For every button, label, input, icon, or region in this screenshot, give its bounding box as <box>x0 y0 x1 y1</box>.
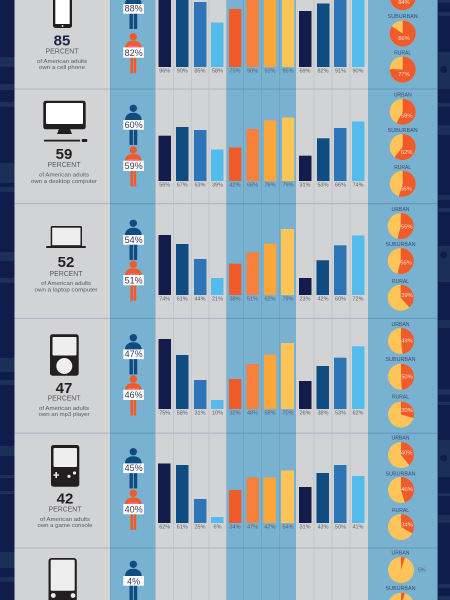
bar chart: cell phone: 82% <box>317 68 329 74</box>
bar chart: mp3 player: 32% <box>229 410 241 416</box>
pie charts: mp3 player: 49% <box>401 338 413 344</box>
bar chart: game console: 61% <box>177 524 188 530</box>
pie charts: laptop computer: URBAN <box>392 207 410 213</box>
pie charts: game console: 46% <box>401 487 413 493</box>
bar chart: desktop computer <box>158 118 364 188</box>
bar chart: game console: 41% <box>352 524 364 530</box>
bar chart: cell phone <box>158 0 364 74</box>
icon: game console <box>51 445 79 487</box>
bar chart: laptop computer: 44% <box>194 296 206 302</box>
pie charts: mp3 player <box>386 322 416 428</box>
stat: 85 percent: of American adults <box>37 59 87 65</box>
stat: 47 percent: own an mp3 player <box>38 412 90 418</box>
bar chart: game console: 6% <box>214 524 222 530</box>
bar chart: game console: 43% <box>317 524 329 530</box>
stat: 85 percent: 85 <box>54 32 70 50</box>
gender figures: cell phone: 82% <box>125 48 143 58</box>
bar chart: game console: 54% <box>282 524 294 530</box>
bar chart: laptop computer: 23% <box>299 296 311 302</box>
stat: 52 percent <box>34 254 98 294</box>
bar chart: desktop computer: 42% <box>229 182 241 188</box>
bar chart: desktop computer: 63% <box>194 182 206 188</box>
stat: 85 percent <box>37 32 87 71</box>
stat: 47 percent: 47 <box>56 380 72 397</box>
bar chart: laptop computer: 51% <box>247 296 258 302</box>
bar chart: game console <box>158 464 364 530</box>
gender figures: game console: 45% <box>125 463 143 473</box>
pie charts: desktop computer: SUBURBAN <box>388 128 418 134</box>
bar chart: mp3 player: 62% <box>352 410 364 416</box>
bar chart: desktop computer: 31% <box>299 182 311 188</box>
bar chart: desktop computer: 39% <box>212 182 223 188</box>
gender figures: laptop computer: 51% <box>125 275 143 285</box>
pie charts: laptop computer: RURAL <box>392 279 409 285</box>
gender figures: desktop computer: 60% <box>125 120 143 130</box>
stat: 47 percent: of American adults <box>39 406 89 412</box>
panel: laptop computer row <box>34 207 416 311</box>
stat: 59 percent: of American adults <box>39 172 89 178</box>
gender figures: desktop computer <box>123 105 144 186</box>
stat: 52 percent: of American adults <box>41 281 91 287</box>
bar chart: game console: 25% <box>194 524 206 530</box>
pie charts: desktop computer: RURAL <box>394 165 411 171</box>
pie charts: mp3 player: SUBURBAN <box>386 357 416 363</box>
bar chart: mp3 player: 31% <box>194 410 206 416</box>
bar chart: laptop computer: 74% <box>159 296 170 302</box>
bar chart: game console: 47% <box>264 524 276 530</box>
gender figures: e-reader: 4% <box>127 576 140 586</box>
bar chart: laptop computer <box>158 229 364 302</box>
bar chart: laptop computer: 21% <box>212 296 223 302</box>
pie charts: game console: SUBURBAN <box>386 472 416 478</box>
stat: 59 percent <box>31 146 97 185</box>
left dark sidebar bands <box>0 57 14 582</box>
pie charts: game console: 34% <box>401 522 413 528</box>
bar chart: cell phone: 85% <box>194 68 206 74</box>
stat: 42 percent <box>38 490 93 529</box>
bar chart: cell phone: 90% <box>177 68 188 74</box>
bar chart: game console: 62% <box>159 524 170 530</box>
pie charts: mp3 player: 30% <box>401 408 413 414</box>
stat: 42 percent: PERCENT <box>48 506 82 514</box>
bar chart: game console: 50% <box>335 524 346 530</box>
bar chart: laptop computer: 62% <box>264 296 276 302</box>
stat: 52 percent: own a laptop computer <box>34 288 98 294</box>
gender figures: cell phone: 88% <box>125 4 143 14</box>
bar chart: mp3 player: 26% <box>299 410 311 416</box>
pie charts: game console <box>386 436 416 540</box>
pie charts: laptop computer: 55% <box>401 225 413 231</box>
gender figures: desktop computer: 59% <box>125 161 143 171</box>
bar chart: desktop computer: 56% <box>159 182 170 188</box>
stat: 59 percent: 59 <box>56 146 72 163</box>
bar chart: laptop computer: 79% <box>282 296 294 302</box>
pie charts: cell phone: 84% <box>398 0 410 6</box>
pie charts: desktop computer: 62% <box>401 150 413 156</box>
pie charts: game console: 40% <box>401 451 413 457</box>
bar chart: desktop computer: 79% <box>282 182 294 188</box>
panel: game console row <box>38 436 416 540</box>
pie charts: cell phone: SUBURBAN <box>388 14 418 20</box>
icon: laptop <box>46 226 86 248</box>
pie charts: laptop computer: SUBURBAN <box>386 242 416 248</box>
bar chart: cell phone: 58% <box>212 68 223 74</box>
bar chart: desktop computer: 74% <box>352 182 364 188</box>
bar chart: desktop computer: 66% <box>335 182 346 188</box>
pie charts: mp3 player: 50% <box>401 375 413 381</box>
stat: 59 percent: own a desktop computer <box>31 179 97 185</box>
pie charts: desktop computer <box>388 92 418 197</box>
bar chart: desktop computer: 53% <box>317 182 329 188</box>
bar chart: game console: 34% <box>229 524 241 530</box>
icon: cell phone <box>53 0 72 28</box>
stat: 52 percent: 52 <box>58 254 74 271</box>
pie charts: laptop computer <box>386 207 416 311</box>
gender figures: laptop computer: 54% <box>125 235 143 245</box>
pie charts: cell phone <box>388 0 418 82</box>
bar chart: laptop computer: 38% <box>229 296 241 302</box>
stat: 47 percent <box>38 380 90 418</box>
gender figures: mp3 player: 47% <box>125 349 143 359</box>
bar chart: laptop computer: 61% <box>177 296 188 302</box>
bar chart: mp3 player <box>158 339 364 416</box>
bar chart: game console: 31% <box>299 524 311 530</box>
bar chart: laptop computer: 72% <box>352 296 364 302</box>
panel: mp3 player row <box>38 322 416 428</box>
icon: mp3 player <box>50 334 79 376</box>
gender figures: mp3 player <box>123 334 144 416</box>
pie charts: cell phone: 77% <box>398 72 410 78</box>
bar chart: cell phone: 95% <box>282 68 294 74</box>
stat: 42 percent: own a game console <box>38 523 93 529</box>
icon: e-reader <box>48 558 77 600</box>
stat: 47 percent: PERCENT <box>48 396 81 402</box>
bar chart: desktop computer: 76% <box>264 182 276 188</box>
gender figures: game console <box>123 448 144 530</box>
pie charts: desktop computer: 56% <box>400 186 412 192</box>
stat: 42 percent: 42 <box>57 490 73 508</box>
pie charts: game console: URBAN <box>392 436 410 442</box>
bar chart: mp3 player: 48% <box>247 410 258 416</box>
bar chart: cell phone: 75% <box>229 68 241 74</box>
panel: desktop computer row <box>31 92 418 197</box>
gender figures: mp3 player: 46% <box>125 390 143 400</box>
pie charts: cell phone: 86% <box>398 36 410 42</box>
bar chart: cell phone: 69% <box>299 68 311 74</box>
bar chart: mp3 player: 58% <box>177 410 188 416</box>
gender figures: game console: 40% <box>125 504 143 514</box>
stat: 85 percent: PERCENT <box>46 48 79 56</box>
bar chart: desktop computer: 66% <box>247 182 258 188</box>
bar chart: cell phone: 90% <box>247 68 258 74</box>
bar chart: cell phone: 93% <box>264 68 276 74</box>
bar chart: cell phone: 96% <box>159 68 170 74</box>
gender figures: laptop computer <box>123 220 144 301</box>
pie charts: e-reader: 5% <box>418 568 426 574</box>
bar chart: mp3 player: 38% <box>317 410 329 416</box>
pie charts: desktop computer: URBAN <box>394 92 412 98</box>
bar chart: mp3 player: 53% <box>335 410 346 416</box>
stat: 59 percent: PERCENT <box>48 162 81 169</box>
bar chart: laptop computer: 60% <box>335 296 346 302</box>
icon: desktop computer <box>43 101 87 142</box>
stat: 52 percent: PERCENT <box>50 271 83 278</box>
pie charts: cell phone: RURAL <box>394 50 411 56</box>
bar chart: mp3 player: 70% <box>282 410 294 416</box>
pie charts: e-reader: SUBURBAN <box>386 586 416 592</box>
gender figures: e-reader <box>123 561 144 600</box>
bar chart: mp3 player: 75% <box>159 410 170 416</box>
bar chart: laptop computer: 42% <box>317 296 329 302</box>
bar chart: game console: 47% <box>247 524 258 530</box>
bar chart: cell phone: 91% <box>335 68 346 74</box>
pie charts: game console: RURAL <box>392 508 409 514</box>
pie charts: mp3 player: URBAN <box>392 322 410 328</box>
pie charts: mp3 player: RURAL <box>392 394 409 400</box>
gender figures: cell phone <box>123 0 144 73</box>
bar chart: cell phone: 90% <box>352 68 364 74</box>
pie charts: desktop computer: 59% <box>401 114 413 120</box>
pie charts: laptop computer: 55% <box>400 261 412 267</box>
bar chart: mp3 player: 58% <box>264 410 276 416</box>
pie charts: e-reader <box>386 550 426 600</box>
panel: e-reader row <box>48 550 426 600</box>
bar chart: desktop computer: 67% <box>177 182 188 188</box>
stat: 85 percent: own a cell phone <box>39 65 85 71</box>
pie charts: e-reader: URBAN <box>392 550 410 556</box>
pie charts: laptop computer: 39% <box>401 293 413 299</box>
panel: cell phone row <box>37 0 418 82</box>
bar chart: mp3 player: 10% <box>212 410 223 416</box>
right dark sidebar bands <box>438 0 450 600</box>
stat: 42 percent: of American adults <box>40 517 90 523</box>
